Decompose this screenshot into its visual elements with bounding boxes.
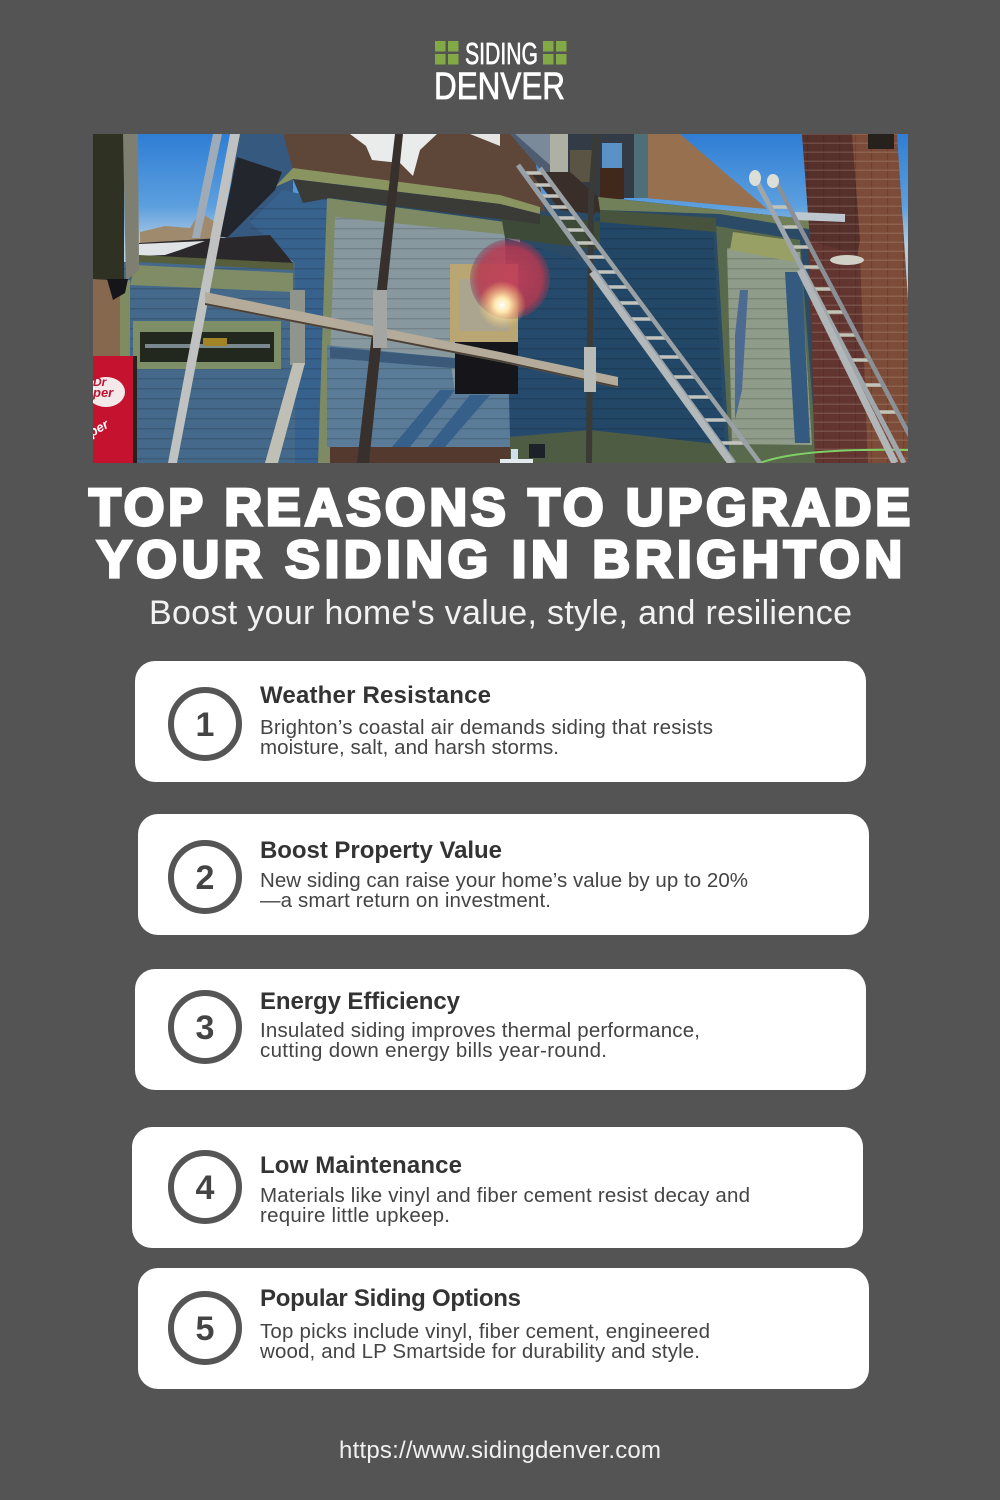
sign: Dr Pepper: Dr <box>93 375 108 389</box>
body: popular siding options: wood, and LP Smartside for durability and style. <box>259 1340 700 1363</box>
left eave <box>93 134 124 281</box>
body: weather resistance: Brighton’s coastal air demands siding that resists <box>260 716 713 739</box>
body: popular siding options: Top picks include vinyl, fiber cement, engineered <box>260 1320 710 1343</box>
number badge 5: 5 <box>196 1310 214 1348</box>
sunlit right wall <box>716 226 816 463</box>
body: low maintenance: require little upkeep. <box>260 1204 450 1227</box>
number badge 3 <box>171 993 239 1061</box>
blue mid section of wall <box>250 190 327 463</box>
heading: low maintenance: Low Maintenance <box>260 1152 462 1179</box>
title <box>89 479 910 589</box>
icon: right window squares <box>543 41 566 64</box>
lower roof <box>139 235 293 263</box>
number badge 2 <box>171 843 239 911</box>
heading: energy efficiency: Energy Efficiency <box>260 988 461 1015</box>
number badge 1 <box>171 690 239 758</box>
dark blue siding wall <box>592 212 725 445</box>
ladder against chimney <box>749 170 912 463</box>
number badge 4 <box>171 1153 239 1221</box>
body: boost property value: New siding can raise your home’s value by up to 20% <box>260 869 748 892</box>
panel: reason 3 energy efficiency <box>135 969 866 1090</box>
body: weather resistance: moisture, salt, and harsh storms. <box>260 736 559 759</box>
sign: Dr Pepper: per <box>85 416 112 440</box>
body: popular siding options <box>259 1320 710 1363</box>
ground and hose <box>330 447 510 463</box>
body: energy efficiency: Insulated siding improves thermal performance, <box>260 1019 700 1042</box>
panel: reason 2 boost property value <box>138 814 869 935</box>
lower left wall <box>120 262 295 463</box>
scaffold and poles <box>192 134 222 238</box>
body: boost property value: —a smart return on investment. <box>260 889 551 912</box>
panel: reason 4 low maintenance <box>132 1127 863 1248</box>
number badge 1: 1 <box>196 706 214 744</box>
panel: reason 1 weather resistance <box>135 661 866 782</box>
ladder against dark wall <box>518 165 760 463</box>
title: TOP REASONS TO UPGRADE <box>89 479 910 537</box>
body: low maintenance <box>260 1184 750 1227</box>
number badge 2: 2 <box>196 859 214 897</box>
upper green fascia <box>275 168 540 214</box>
lower eave <box>598 197 809 229</box>
number badge 5 <box>171 1294 239 1362</box>
heading: boost property value: Boost Property Value <box>260 837 502 864</box>
body: weather resistance <box>260 716 713 759</box>
body: boost property value <box>260 869 748 912</box>
horizontal ladder <box>205 290 618 392</box>
main roof <box>225 134 293 240</box>
sign: Dr Pepper: per <box>92 385 114 400</box>
title: YOUR SIDING IN BRIGHTON <box>97 531 902 589</box>
body: energy efficiency <box>260 1019 700 1062</box>
window with sun flare <box>450 239 550 394</box>
number badge 3: 3 <box>196 1009 214 1047</box>
footer url: https://www.sidingdenver.com <box>339 1437 661 1464</box>
logo word: Siding: SIDING <box>465 36 538 71</box>
sunlit main wall <box>318 198 520 463</box>
body: low maintenance: Materials like vinyl and fiber cement resist decay and <box>260 1184 750 1207</box>
number badge 4: 4 <box>196 1169 215 1207</box>
icon: left window squares <box>435 41 458 64</box>
logo: Siding Denver <box>434 36 566 108</box>
chimney <box>802 134 908 463</box>
photo: house with ladders during siding work <box>85 134 912 463</box>
heading: popular siding options: Popular Siding Options <box>260 1285 521 1312</box>
heading: weather resistance: Weather Resistance <box>260 682 491 709</box>
subtitle: Boost your home's value, style, and resilience <box>149 594 852 632</box>
panel: reason 5 popular siding options <box>138 1268 869 1389</box>
sign: Dr Pepper <box>93 356 137 463</box>
dormer <box>510 134 550 172</box>
logo word: Denver: DENVER <box>434 66 565 108</box>
body: energy efficiency: cutting down energy bills year-round. <box>260 1039 607 1062</box>
